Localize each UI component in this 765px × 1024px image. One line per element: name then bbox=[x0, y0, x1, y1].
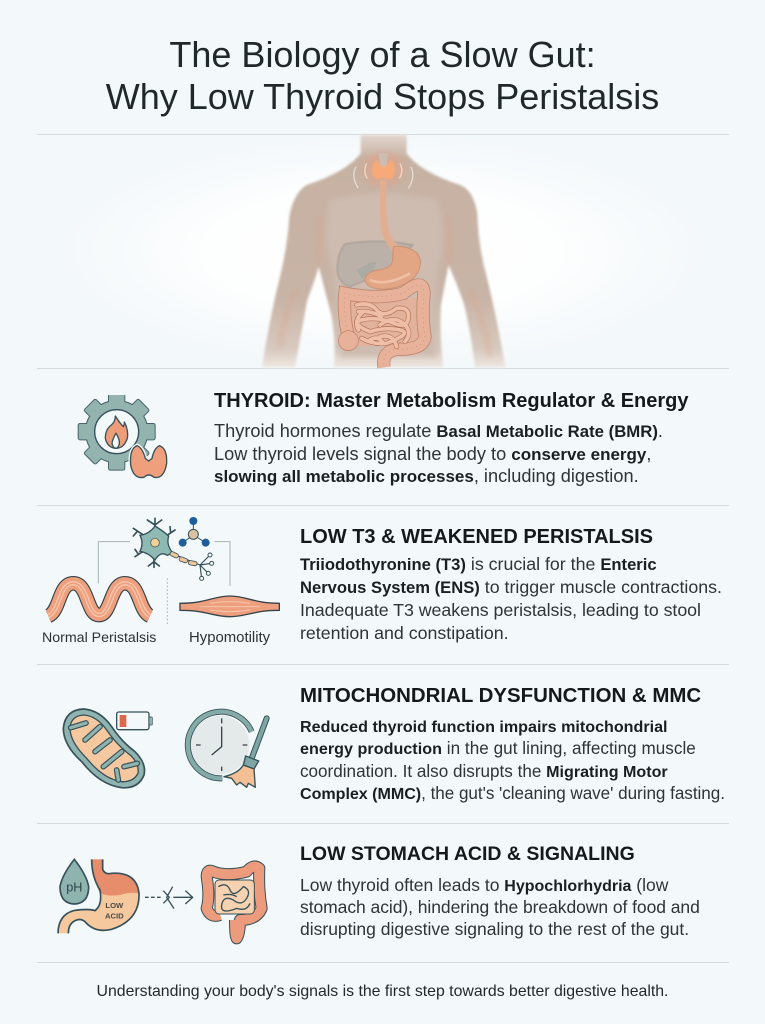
section 2 text: Inadequate T3 weakens peristalsis, leading to stool bbox=[300, 600, 701, 620]
title: Why Low Thyroid Stops Peristalsis bbox=[106, 76, 659, 117]
section 3 text: Reduced thyroid function impairs mitochondrial bbox=[300, 718, 668, 736]
section 4 icons: pH drop, stomach, arrow and intestine bbox=[57, 858, 268, 944]
clock bbox=[191, 716, 249, 774]
body bbox=[262, 135, 505, 367]
section 2 text bbox=[300, 554, 722, 642]
glow and neck arcs bbox=[362, 152, 405, 187]
mitochondrion bbox=[63, 709, 144, 788]
section 1 text bbox=[214, 421, 663, 486]
footer note: Understanding your body's signals is the first step towards better digestive health. bbox=[97, 983, 668, 1000]
thyroid bbox=[378, 153, 388, 169]
neuron bbox=[133, 518, 175, 567]
section 4 text: Low thyroid often leads to Hypochlorhydria (low bbox=[300, 875, 668, 895]
section 1 text: slowing all metabolic processes, including digestion. bbox=[214, 466, 639, 486]
section 2 text: Nervous System (ENS) to trigger muscle contractions. bbox=[300, 577, 722, 597]
flame bbox=[105, 416, 128, 448]
large intestine bbox=[344, 285, 425, 367]
label: normal peristalsis: Normal Peristalsis bbox=[42, 630, 156, 646]
label: hypomotility: Hypomotility bbox=[189, 630, 270, 646]
small intestine bbox=[357, 304, 409, 347]
T3 molecule bbox=[183, 521, 206, 543]
section 4 text: disrupting digestive signaling to the rest of the gut. bbox=[300, 919, 689, 939]
section 3 text: energy production in the gut lining, affecting muscle bbox=[300, 739, 696, 758]
section 3 icons: mitochondrion, battery, clock and broom bbox=[62, 708, 270, 789]
section 2 text: Triiodothyronine (T3) is crucial for the Enteric bbox=[300, 554, 657, 574]
thyroid bbox=[130, 446, 167, 478]
section 4 text: stomach acid), hindering the breakdown of food and bbox=[300, 897, 700, 917]
abdominal backdrop bbox=[350, 297, 420, 347]
esophagus and stomach bbox=[382, 180, 400, 252]
broken arrow bbox=[145, 895, 162, 899]
hypomotility muscle bbox=[180, 596, 279, 617]
section 2 text: retention and constipation. bbox=[300, 622, 509, 642]
stomach: LOW bbox=[105, 901, 124, 910]
intestine bbox=[207, 866, 262, 938]
section 4 heading: LOW STOMACH ACID & SIGNALING bbox=[300, 843, 635, 865]
section 4 text bbox=[300, 875, 700, 939]
section 2 heading: LOW T3 & WEAKENED PERISTALSIS bbox=[300, 526, 653, 548]
pH drop: pH bbox=[66, 881, 82, 895]
section 1 text: Thyroid hormones regulate Basal Metabolic Rate (BMR). bbox=[214, 421, 663, 441]
stomach: ACID bbox=[105, 911, 124, 920]
section 3 heading: MITOCHONDRIAL DYSFUNCTION & MMC bbox=[300, 684, 701, 707]
section 3 text: coordination. It also disrupts the Migrating Motor bbox=[300, 762, 668, 780]
section 1 icon: gear with flame and thyroid bbox=[78, 395, 168, 478]
title: The Biology of a Slow Gut: bbox=[169, 34, 596, 75]
section 2 icon: neuron, normal peristalsis and hypomotility bbox=[46, 517, 280, 624]
section 1 text: Low thyroid levels signal the body to conserve energy, bbox=[214, 444, 651, 464]
normal peristalsis wave bbox=[48, 583, 150, 616]
section 1 heading: THYROID: Master Metabolism Regulator & Energy bbox=[214, 390, 689, 412]
stomach bbox=[58, 859, 139, 933]
section 3 text: Complex (MMC), the gut's 'cleaning wave' during fasting. bbox=[300, 784, 725, 802]
liver bbox=[337, 241, 413, 287]
battery bbox=[117, 712, 149, 730]
pH drop bbox=[60, 859, 89, 904]
title bbox=[106, 34, 659, 117]
section 3 text bbox=[300, 718, 725, 802]
broom bbox=[252, 718, 267, 758]
